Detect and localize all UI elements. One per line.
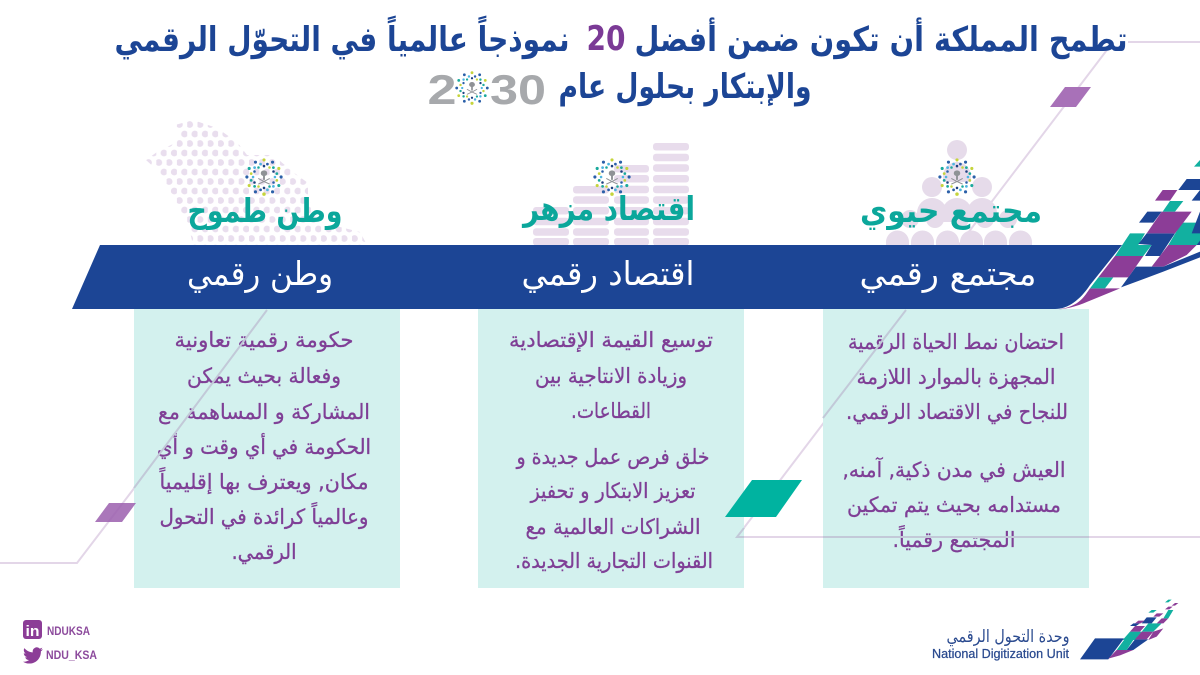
social: linkedin bbox=[23, 620, 90, 640]
emblem: middle column bbox=[594, 159, 630, 196]
banner bbox=[72, 245, 1122, 309]
banner label: digital economy: اقتصاد رقمي bbox=[522, 254, 694, 293]
emblem: left column bbox=[246, 159, 282, 196]
banner label: digital society: مجتمع رقمي bbox=[860, 254, 1036, 293]
digital society text: للنجاح في الاقتصاد الرقمي. bbox=[846, 400, 1068, 424]
background line: lower left bbox=[0, 245, 320, 563]
teal parallelogram bbox=[725, 480, 802, 517]
national digitization unit logo: National Digitization Unit bbox=[932, 647, 1070, 661]
digital economy text: القنوات التجارية الجديدة. bbox=[515, 549, 713, 573]
digital society text: المجهزة بالموارد اللازمة bbox=[856, 365, 1056, 389]
flag mosaic at banner end bbox=[1058, 160, 1200, 309]
panel: digital economy bbox=[478, 309, 744, 588]
digital society text: مستدامه بحيث يتم تمكين bbox=[847, 493, 1061, 518]
heading: vibrant society: مجتمع حيوي bbox=[860, 191, 1042, 231]
digital nation text: مكان, ويعترف بها إقليمياً bbox=[159, 466, 368, 495]
decorative parallelogram: top right bbox=[1050, 87, 1091, 107]
digital nation text: وعالمياً كرائدة في التحول bbox=[160, 501, 368, 529]
digital economy text: توسيع القيمة الإقتصادية bbox=[509, 328, 713, 352]
digital nation text: المشاركة و المساهمة مع bbox=[158, 400, 370, 424]
lines crossing the panels bbox=[134, 310, 1089, 537]
social: linkedin: NDUKSA bbox=[47, 624, 90, 638]
panel: digital society bbox=[823, 309, 1089, 588]
digital economy text: تعزيز الابتكار و تحفيز bbox=[530, 479, 696, 503]
title line 2: والإبتكار بحلول عام bbox=[558, 67, 812, 107]
people pyramid silhouette bbox=[886, 140, 1032, 245]
number 20: 20 bbox=[586, 19, 626, 59]
banner label: digital nation: وطن رقمي bbox=[187, 254, 333, 293]
digital economy text: وزيادة الانتاجية بين bbox=[535, 364, 687, 388]
digital society text: احتضان نمط الحياة الرقمية bbox=[848, 330, 1064, 354]
digital nation text: الرقمي. bbox=[232, 540, 296, 564]
digital nation text: وفعالة بحيث يمكن bbox=[187, 364, 341, 388]
panel: digital nation bbox=[134, 309, 400, 588]
digital nation text: الحكومة في أي وقت و أي bbox=[157, 433, 371, 459]
social: twitter bbox=[23, 647, 97, 664]
digital economy text: خلق فرص عمل جديدة و bbox=[516, 445, 710, 469]
digital society text: المجتمع رقمياً. bbox=[892, 524, 1016, 552]
digital society text bbox=[842, 330, 1068, 552]
vision 2030 logo: 2 bbox=[428, 66, 456, 113]
bar chart silhouette bbox=[533, 143, 689, 246]
saudi map dotted silhouette bbox=[146, 120, 367, 245]
digital society text: العيش في مدن ذكية, آمنه, bbox=[842, 457, 1066, 482]
national digitization unit logo bbox=[932, 600, 1178, 661]
vision 2030 logo bbox=[428, 66, 546, 113]
vision 2030 logo: 30 bbox=[490, 66, 546, 113]
heading: ambitious nation: وطن طموح bbox=[188, 191, 342, 231]
digital economy text: القطاعات. bbox=[571, 399, 651, 423]
digital nation text bbox=[157, 328, 371, 564]
emblem: right column bbox=[939, 159, 975, 196]
social: linkedin: in bbox=[26, 623, 40, 640]
title bbox=[114, 15, 1128, 107]
heading: thriving economy: اقتصاد مزهر bbox=[521, 189, 695, 229]
digital nation text: حكومة رقمية تعاونية bbox=[174, 328, 354, 352]
digital economy text bbox=[509, 328, 713, 573]
title line 1: left part: نموذجاً عالمياً في التحوّل الرقمي bbox=[114, 15, 570, 60]
national digitization unit logo: وحدة التحول الرقمي bbox=[946, 627, 1070, 647]
social: twitter: NDU_KSA bbox=[46, 648, 97, 662]
digital economy text: الشراكات العالمية مع bbox=[526, 515, 700, 539]
purple parallelogram: lower left bbox=[95, 503, 136, 522]
background lines: upper right bbox=[737, 42, 1200, 537]
